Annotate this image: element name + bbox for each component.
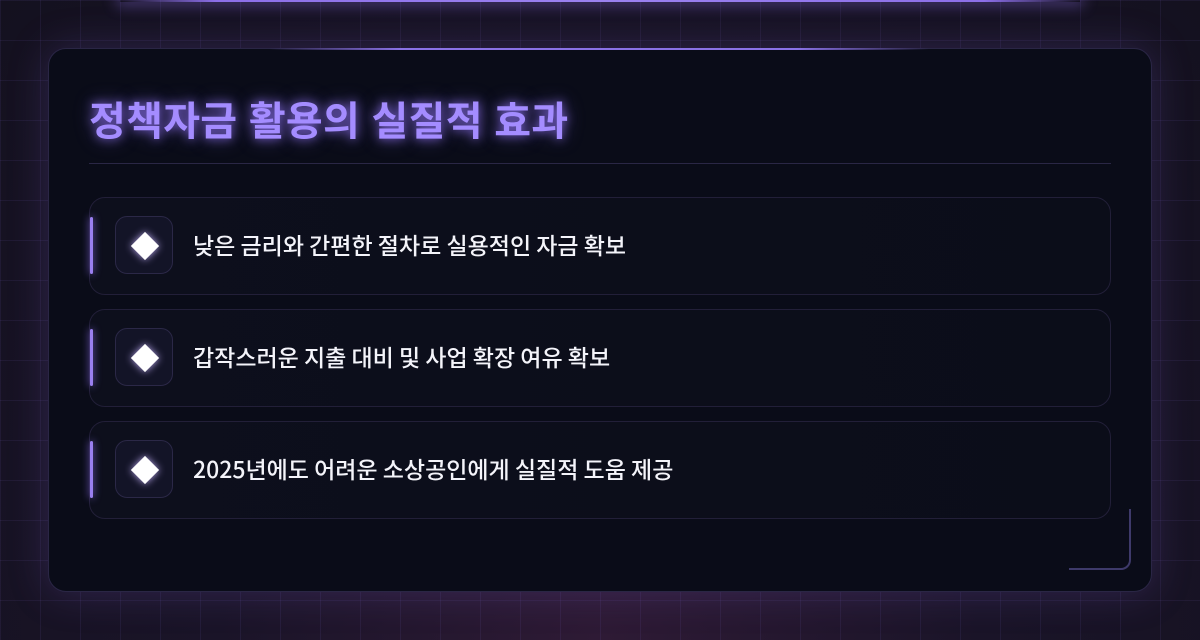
icon: diamond: [115, 440, 173, 498]
item 1: [89, 197, 1111, 295]
icon: diamond: [115, 328, 173, 386]
icon: diamond: [115, 216, 173, 274]
item 2: [89, 309, 1111, 407]
text 3: 2025년에도 어려운 소상공인에게 실질적 도움 제공: [193, 451, 673, 485]
text 1: 낮은 금리와 간편한 절차로 실용적인 자금 확보: [193, 227, 626, 261]
item 3: [89, 421, 1111, 519]
text 2: 갑작스러운 지출 대비 및 사업 확장 여유 확보: [193, 339, 610, 373]
title: 정책자금 활용의 실질적 효과: [89, 100, 568, 144]
panel: main card: [48, 48, 1152, 592]
